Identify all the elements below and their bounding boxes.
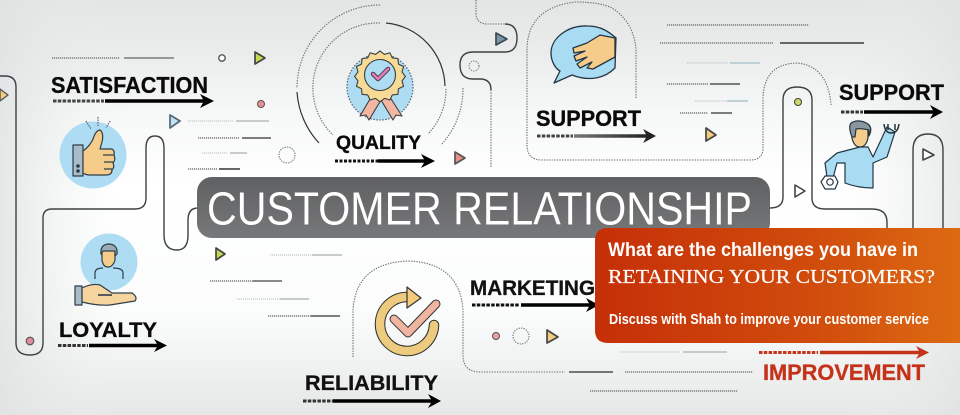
label: quality [335, 133, 435, 168]
label: loyalty [58, 318, 167, 352]
label: marketing [470, 276, 599, 312]
label: support middle: SUPPORT [536, 106, 642, 131]
icon: loyalty person and hand [75, 234, 138, 305]
label: marketing: MARKETING [470, 276, 595, 300]
decorative lines [52, 25, 864, 391]
label: quality: QUALITY [336, 133, 421, 154]
label: improvement: IMPROVEMENT [763, 360, 926, 385]
label: support right [839, 80, 945, 119]
label: improvement [759, 346, 929, 385]
label: support middle [536, 106, 656, 143]
callout: orange box [595, 228, 960, 343]
icon: reliability check [380, 287, 436, 351]
label: loyalty: LOYALTY [59, 318, 157, 342]
label: reliability [303, 371, 441, 408]
heading pill: CUSTOMER RELATIONSHIP [207, 182, 752, 234]
icon: quality badge [347, 51, 413, 120]
label: support right: SUPPORT [839, 80, 945, 105]
callout question line two: RETAINING YOUR CUSTOMERS? [608, 266, 935, 288]
dotted panel outlines [353, 0, 831, 372]
connector lines [0, 24, 943, 355]
icon: speech bubble with hand [551, 26, 616, 83]
callout question line one: What are the challenges you have in [608, 240, 918, 261]
small markers [0, 33, 934, 345]
quality arcs [297, 5, 463, 145]
icon: support worker [821, 121, 899, 189]
icon: thumbs up [60, 117, 126, 188]
label: satisfaction: SATISFACTION [51, 72, 208, 98]
label: reliability: RELIABILITY [305, 371, 438, 395]
